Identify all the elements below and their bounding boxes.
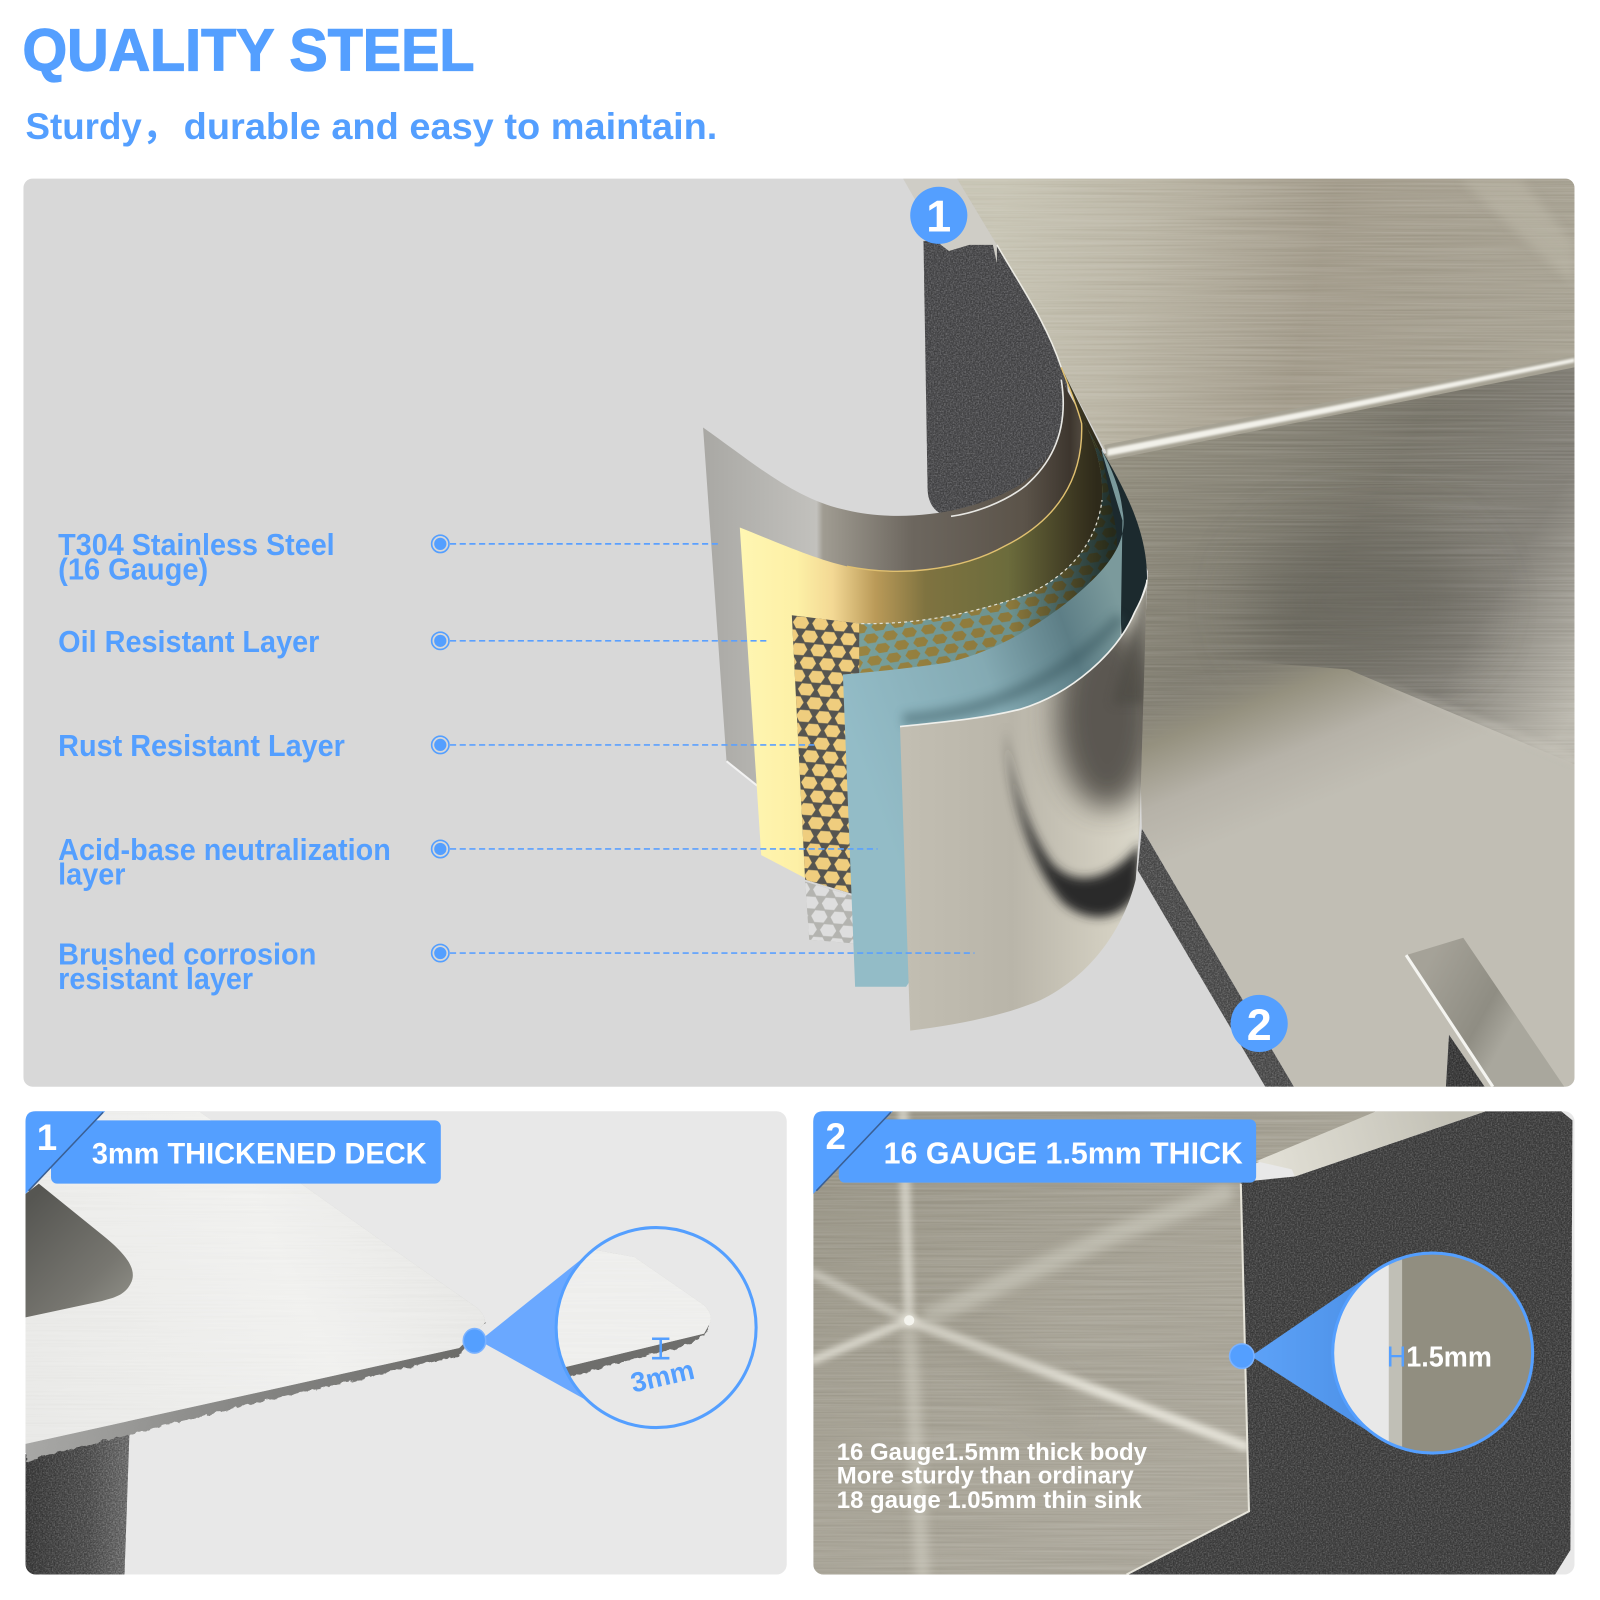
label: Brushed corrosion resistant layer: resistant layer [58,962,253,996]
deck edge thickness [26,1321,486,1461]
sink interior steel [813,1111,1385,1574]
label: Brushed corrosion resistant layer: Brushed corrosion [58,937,316,971]
label: Acid-base neutralization layer: Acid-base neutralization [58,833,391,867]
wall shadow [1250,526,1474,679]
layer: T304 back steel [703,380,1084,786]
sink left edge highlight [997,245,1061,367]
sink interior photo [903,179,1574,1087]
layer: brushed front steel [900,580,1158,1031]
foam under deck [26,1429,130,1574]
deck photo [26,1111,486,1574]
leader lines and dots [432,535,974,962]
magnifier circle [541,1228,756,1428]
body text: 16 Gauge1.5mm thick body [837,1439,1147,1466]
callout dot [463,1329,486,1353]
lower sink wall [1102,362,1574,776]
tab: 3mm thickened deck: 3mm THICKENED DECK [92,1137,427,1170]
steel reflections [1005,582,1158,917]
floor crease highlight [1386,684,1569,756]
rim bend line [1104,355,1574,460]
layer: oil resistant gold [740,367,1107,893]
rim highlight [1107,358,1574,456]
panel: 16 gauge 1.5mm thick [813,1111,1574,1574]
layer: acid-base teal [843,449,1124,987]
label: T304 Stainless Steel: (16 Gauge) [58,553,208,587]
title: QUALITY STEEL [22,16,474,83]
foam bottom strip [1138,829,1294,1087]
body text: More sturdy than ordinary [837,1463,1134,1490]
label: T304 Stainless Steel: T304 Stainless Steel [58,528,335,562]
label: Oil Resistant Layer: Oil Resistant Layer [58,625,319,659]
badge 2: 2 [1247,999,1272,1050]
magnifier circle [1333,1251,1537,1455]
hex mesh left strip [792,615,859,896]
cutout white edge [1406,955,1493,1087]
label: Acid-base neutralization layer: layer [58,858,126,892]
label: Acid-base neutralization layer [58,833,391,892]
badge 2 [1231,995,1288,1052]
deck surface [26,1111,485,1444]
upper sink wall [957,179,1574,449]
label: Rust Resistant Layer: Rust Resistant Layer [58,729,345,763]
upper wall light streak [1470,182,1573,274]
1.5mm value: H1.5mm [1387,1341,1492,1373]
body text: 18 gauge 1.05mm thin sink [837,1487,1142,1514]
dimension mark [652,1339,669,1358]
3mm value: 3mm [628,1354,697,1399]
sink floor [1138,653,1574,1087]
subtitle: Sturdy， [26,106,179,147]
tab: 16 gauge [813,1111,1256,1194]
tab: 16 gauge: 16 GAUGE 1.5mm THICK [884,1136,1243,1170]
sink cutout [26,1184,133,1317]
layer: rust resistant hex mesh [792,419,1122,944]
dark inner shadow [1101,449,1147,653]
subtitle: durable and easy to maintain. [184,106,717,147]
label: T304 Stainless Steel [58,528,335,587]
foam underside top [923,241,1068,516]
tab: 16 gauge: 2 [826,1116,846,1157]
foam back of sink [1122,1111,1572,1574]
creases [813,1111,1245,1574]
label: Brushed corrosion resistant layer [58,937,316,996]
cutout foam [1446,1035,1485,1087]
panel: main layer diagram [23,179,1574,1087]
callout cone [480,1254,588,1401]
badge 1 [910,187,967,244]
cutout steel strip [1406,938,1564,1087]
hex mesh band [855,419,1122,714]
body text [837,1439,1147,1514]
teal shadow [903,617,1120,719]
tab: 3mm thickened deck [26,1111,441,1194]
callout cone [1251,1268,1380,1439]
badge 1: 1 [926,191,951,242]
deck strip [1256,1111,1486,1177]
steel right edge [1127,1184,1249,1574]
hex mesh silver end [805,882,859,944]
deck rim piece [903,179,997,263]
callout dot [1230,1344,1254,1368]
tab: 3mm thickened deck: 1 [37,1117,57,1158]
panel: 3mm thickened deck [26,1111,787,1574]
